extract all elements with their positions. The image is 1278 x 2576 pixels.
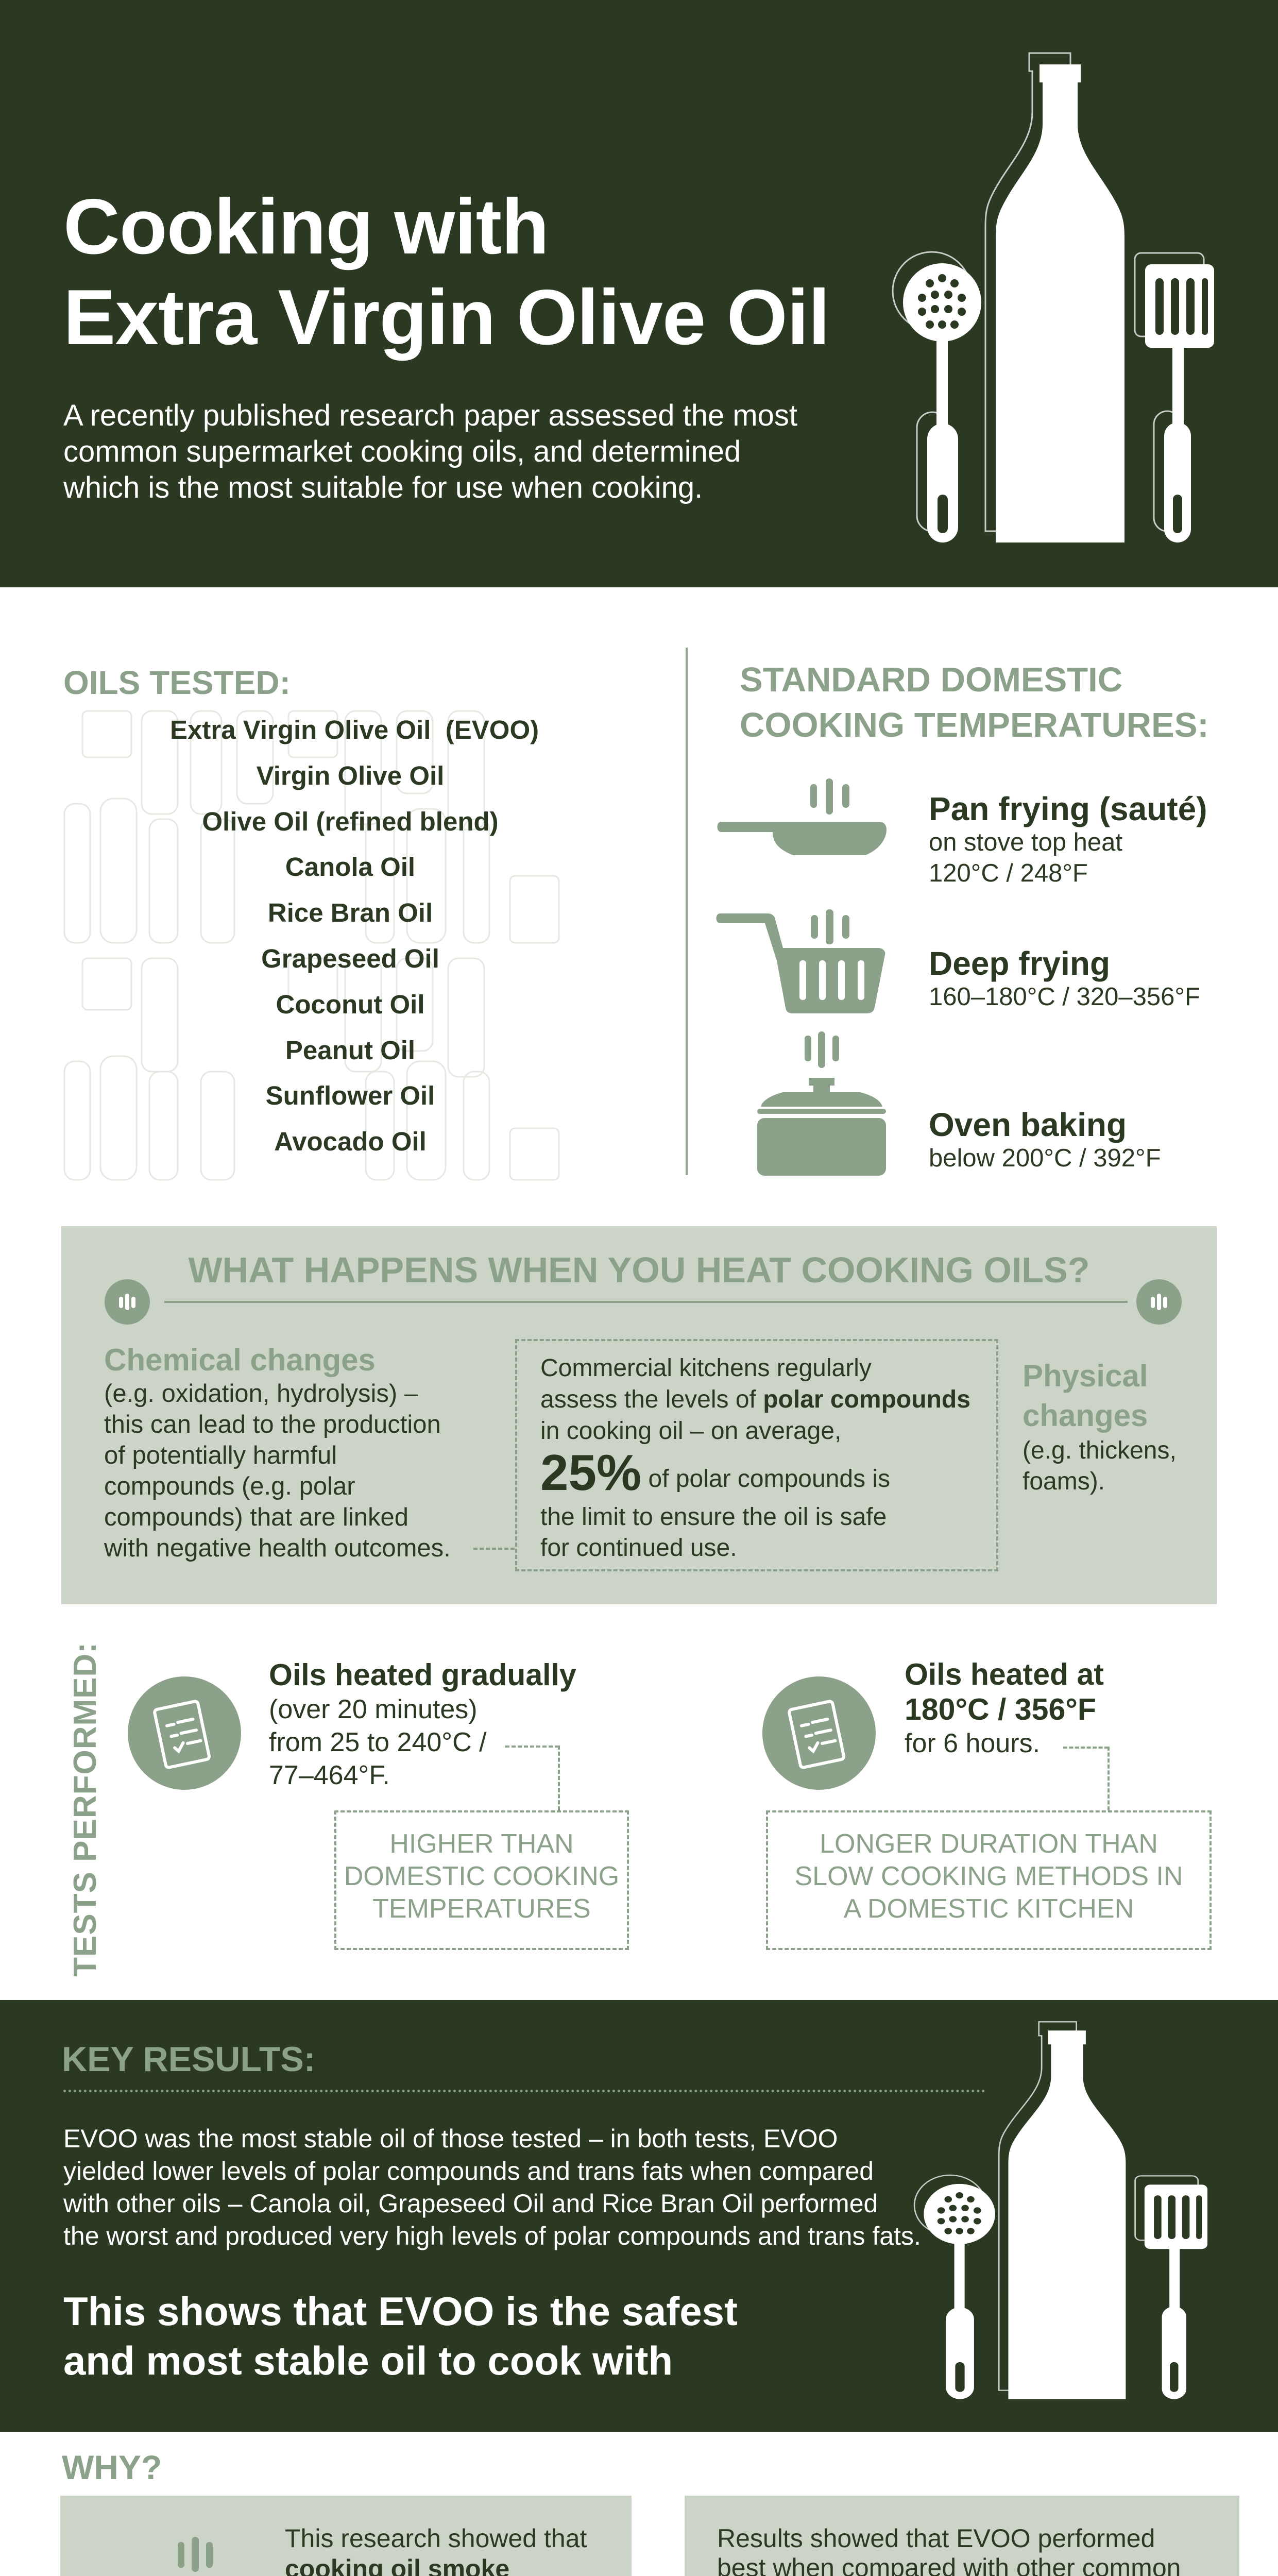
text: chemical changes: of potentially harmful [104, 1442, 337, 1469]
text: physical changes: foams). [1023, 1468, 1105, 1495]
callout: longer duration [766, 1810, 1212, 1950]
callout: higher than domestic: DOMESTIC COOKING [344, 1861, 619, 1891]
background bottle outlines [64, 710, 559, 1181]
text: chemical changes: (e.g. oxidation, hydrolysis) – [104, 1380, 418, 1408]
text: oils heated gradually [269, 1658, 576, 1790]
icon: pan [77, 2537, 260, 2576]
conclusion: and most stable oil to cook with [63, 2338, 673, 2383]
oil list: Grapeseed Oil [261, 944, 439, 973]
panel: results [685, 2496, 1239, 2576]
text: oils heated at 180 [905, 1657, 1104, 1760]
callout: polar compounds: assess the levels of polar compounds [540, 1386, 970, 1413]
heading: oils tested: OILS TESTED: [63, 664, 291, 701]
text: pan frying: Pan frying (sauté) [929, 790, 1207, 827]
text: chemical changes: this can lead to the production [104, 1411, 441, 1438]
icons: pan, fryer, pot [716, 778, 887, 1176]
text: oils heated at 180: 180°C / 356°F [905, 1692, 1096, 1726]
panel: key results [0, 2000, 1278, 2432]
callout: longer duration: SLOW COOKING METHODS IN [794, 1861, 1183, 1891]
header band [0, 0, 1278, 587]
callout: polar compounds: in cooking oil – on average, [540, 1417, 841, 1445]
text: deep frying: 160–180°C / 320–356°F [929, 983, 1200, 1011]
icon: clipboard 2 [762, 1676, 876, 1790]
text: oils heated gradually: (over 20 minutes) [269, 1694, 478, 1724]
text: pan frying: on stove top heat [929, 828, 1122, 856]
text: oven baking: below 200°C / 392°F [929, 1144, 1161, 1172]
oil list: Olive Oil (refined blend) [202, 807, 499, 836]
oil list: Avocado Oil [274, 1127, 427, 1156]
text: oils heated at 180: Oils heated at [905, 1657, 1104, 1691]
callout: polar compounds: the limit to ensure the oil is safe [540, 1503, 887, 1531]
subtitle: which is the most suitable for use when cooking. [63, 471, 703, 504]
vertical label: TESTS PERFORMED: [67, 1642, 103, 1977]
text: chemical changes: Chemical changes [104, 1343, 376, 1377]
title: Extra Virgin Olive Oil [63, 274, 829, 361]
text: This research showed that [285, 2524, 587, 2553]
text: pan frying: 120°C / 248°F [929, 859, 1088, 887]
icon: bottle and utensils [899, 2021, 1218, 2402]
heading: WHAT HAPPENS WHEN YOU HEAT COOKING OILS? [188, 1250, 1090, 1290]
oil list: Rice Bran Oil [268, 898, 433, 927]
heading: temperatures: STANDARD DOMESTIC [740, 660, 1122, 699]
text: physical changes: Physical [1023, 1359, 1148, 1393]
text: oven baking [929, 1106, 1161, 1172]
panel: standard domestic cooking temperatures [716, 660, 1209, 1176]
oil list: Peanut Oil [285, 1036, 415, 1065]
heading: key results: KEY RESULTS: [62, 2040, 315, 2079]
subtitle: A recently published research paper assessed the most [63, 399, 797, 432]
oil list: Coconut Oil [276, 990, 424, 1019]
text: chemical changes [104, 1343, 451, 1562]
conclusion: This shows that EVOO is the safest [63, 2289, 738, 2334]
text 1: Results showed that EVOO performed [717, 2524, 1155, 2553]
callout: higher than domestic: TEMPERATURES [372, 1894, 591, 1924]
callout: longer duration: LONGER DURATION THAN [820, 1829, 1158, 1859]
oil list [170, 715, 539, 1156]
text: oils heated at 180: for 6 hours. [905, 1728, 1040, 1758]
panel: smoke point [60, 2496, 632, 2576]
heading: temperatures: COOKING TEMPERATURES: [740, 706, 1209, 744]
oil list: Virgin Olive Oil [257, 761, 444, 790]
oil list: Canola Oil [285, 852, 415, 882]
body text: EVOO was the most stable oil of those tested – in both tests, EVOO [63, 2124, 838, 2153]
subtitle [63, 399, 797, 504]
body text: with other oils – Canola oil, Grapeseed Oil and Rice Bran Oil performed [63, 2189, 878, 2218]
heading: temperatures [740, 660, 1209, 744]
callout: higher than domestic: HIGHER THAN [389, 1829, 574, 1859]
panel: oils tested [63, 664, 559, 1181]
heading: why: WHY? [62, 2448, 162, 2486]
text: chemical changes: compounds (e.g. polar [104, 1472, 355, 1500]
callout: polar compounds: 25% of polar compounds is [540, 1444, 890, 1501]
callout: higher than domestic [334, 1810, 629, 1950]
text: pan frying [929, 790, 1207, 887]
callout: polar compounds [515, 1339, 998, 1571]
text 1 [717, 2524, 1181, 2576]
conclusion [63, 2286, 738, 2385]
panel: what happens when you heat cooking oils [61, 1226, 1217, 1604]
icon: clipboard 1 [128, 1676, 241, 1790]
icon: left steam circle [105, 1279, 150, 1325]
oil list: Extra Virgin Olive Oil (EVOO) [170, 715, 539, 744]
text: physical changes: (e.g. thickens, [1023, 1437, 1177, 1464]
text: oils heated gradually: 77–464°F. [269, 1760, 390, 1790]
subtitle: common supermarket cooking oils, and determined [63, 435, 741, 468]
callout: polar compounds: Commercial kitchens regularly [540, 1354, 872, 1382]
callout: longer duration: A DOMESTIC KITCHEN [844, 1894, 1134, 1924]
section: tests performed [67, 1642, 1212, 1977]
callout: polar compounds: for continued use. [540, 1534, 737, 1562]
text: physical changes [1023, 1359, 1177, 1495]
icon: right steam circle [1136, 1279, 1182, 1325]
title: Cooking with [63, 183, 549, 270]
body text [63, 2123, 921, 2252]
text: oven baking: Oven baking [929, 1106, 1127, 1143]
title [63, 183, 829, 361]
text [285, 2523, 587, 2576]
icon: bottle and utensils [892, 53, 1214, 543]
body text: the worst and produced very high levels of polar compounds and trans fats. [63, 2222, 921, 2250]
text: chemical changes: compounds) that are linked [104, 1503, 408, 1531]
oil list: Sunflower Oil [266, 1081, 435, 1110]
text: oils heated gradually: Oils heated gradually [269, 1658, 576, 1692]
body text: yielded lower levels of polar compounds and trans fats when compared [63, 2157, 874, 2185]
text: oils heated gradually: from 25 to 240°C / [269, 1727, 487, 1757]
text: physical changes: changes [1023, 1398, 1148, 1433]
text: deep frying: Deep frying [929, 945, 1110, 982]
text: chemical changes: with negative health outcomes. [104, 1534, 451, 1562]
text: deep frying [929, 945, 1200, 1011]
